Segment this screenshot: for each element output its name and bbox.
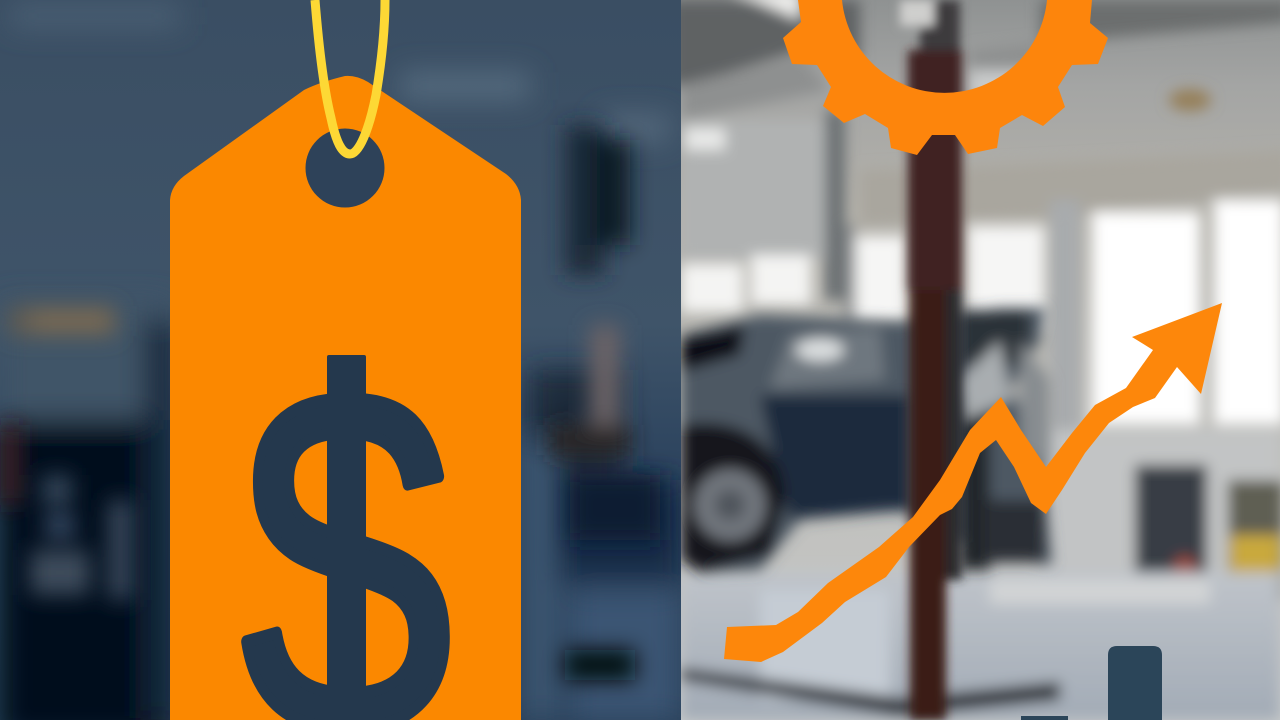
arrow: rising trend line xyxy=(724,303,1222,662)
icon: price tag xyxy=(170,0,521,720)
bar chart: bars at bottom right xyxy=(1021,646,1162,720)
tall bar xyxy=(1108,646,1162,720)
panel: blurred blue photo, left xyxy=(0,0,681,720)
tag string xyxy=(315,0,385,154)
short bar xyxy=(1021,716,1068,720)
car xyxy=(681,308,1052,572)
tag body xyxy=(170,76,521,720)
lift post xyxy=(900,0,962,720)
tag hole xyxy=(306,128,384,208)
panel: blurred garage photo, right xyxy=(670,0,1280,720)
icon: gear xyxy=(783,0,1108,155)
